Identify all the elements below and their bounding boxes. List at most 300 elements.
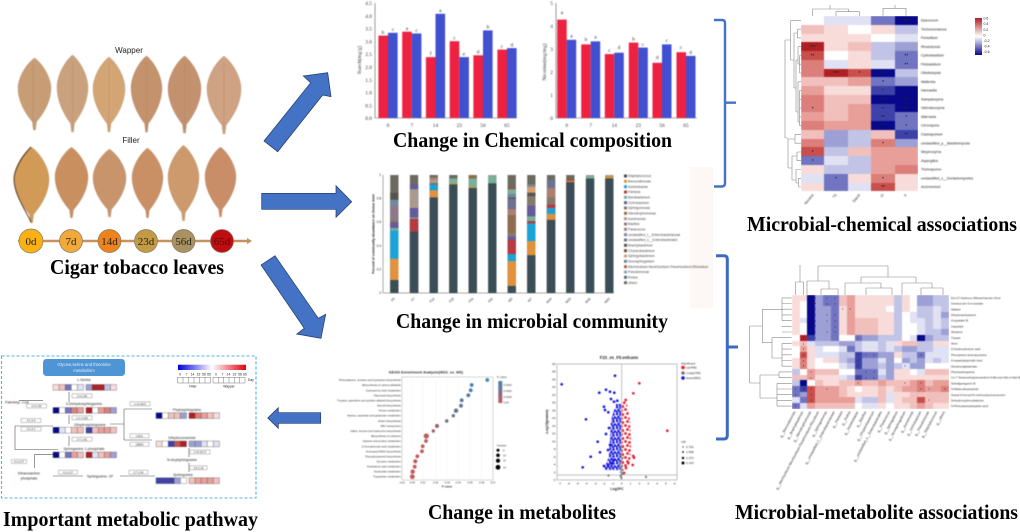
colour scale legend: -0.6 xyxy=(984,50,990,54)
timeline: 14d xyxy=(101,236,118,248)
heatmap grid: bacteria vs metabolites xyxy=(792,295,949,409)
column labels: g__Aureimonas xyxy=(900,410,915,433)
bar W23 xyxy=(566,175,574,293)
axis labels: Log2FC xyxy=(610,487,624,491)
column labels: g__Chryseobacterium xyxy=(856,410,875,442)
column labels: g__Pseudomonas xyxy=(914,410,930,437)
bracket: metabolite associations xyxy=(716,256,738,439)
colour scale legend xyxy=(975,16,990,55)
significance stars: * xyxy=(859,71,861,77)
axis labels: 1 xyxy=(379,173,381,177)
chart: starch bars: c xyxy=(392,27,395,33)
metabolite labels: L-Serine xyxy=(77,378,91,382)
axis labels: 0 xyxy=(554,478,556,482)
chart: starch bars: Starch(mg/g) xyxy=(356,46,363,74)
x axis: 0.01 xyxy=(420,480,426,484)
chart: nicotine bars: 65 xyxy=(683,123,689,129)
arrow: to chemical composition xyxy=(264,73,331,152)
pathway labels: Purine metabolism xyxy=(379,409,402,413)
legend: VIP: 3.143 xyxy=(686,461,694,465)
row labels: Aloin xyxy=(951,342,958,346)
chart: starch bars: d xyxy=(477,50,480,56)
chart: microbial community stacked bars xyxy=(372,173,709,304)
pathway labels: Alanine, aspartate and glutamate metabolism xyxy=(347,414,402,418)
chart: starch bars: 1.5 xyxy=(365,78,372,84)
pathway labels: Biosynthesis of various alkaloids xyxy=(362,383,402,387)
column labels: g__Brachybacterium xyxy=(786,410,804,440)
row labels: Cladosporium xyxy=(921,132,943,136)
filler leaf row xyxy=(14,145,236,223)
axis labels: F7 xyxy=(410,297,416,302)
chart: nicotine bars: b xyxy=(632,36,635,42)
legend: number: 8 xyxy=(503,448,505,452)
row labels: Dihydrotachysterol xyxy=(951,313,976,317)
chart: nicotine bars xyxy=(541,1,697,129)
label: Wapper: Wapper xyxy=(115,46,143,55)
significance stars: * xyxy=(882,141,884,147)
axis labels: -Log10(pvalue) xyxy=(545,410,549,434)
row labels: Oxypalatin B xyxy=(951,319,968,323)
pathway legend: 65 xyxy=(207,372,211,376)
column labels: g__unclassified_o__Enterobacterales xyxy=(853,410,883,462)
chart: starch bars: f xyxy=(430,50,432,57)
chart: nicotine bars: 56 xyxy=(659,123,665,129)
enzyme boxes: CERS xyxy=(136,442,144,446)
pathway labels: Steroid biosynthesis xyxy=(377,404,402,408)
row labels xyxy=(951,296,1020,408)
colour scale legend: -0.4 xyxy=(984,44,990,48)
significance stars: * xyxy=(905,115,907,121)
pathway legend: 56 xyxy=(202,372,206,376)
pathway title badge: metabolism xyxy=(73,368,95,373)
row labels: N-Phenylacetylaspartic acid xyxy=(951,404,988,408)
legend: VIP: 1.558 xyxy=(686,450,694,454)
axis labels: -7 xyxy=(558,482,561,486)
pathway labels: Tropane, piperidine and pyridine alkaloid biosynthesis xyxy=(337,398,402,402)
arrow: to metabolites xyxy=(261,256,326,338)
significance stars: *** xyxy=(833,71,839,77)
chart: nicotine bars: 5 xyxy=(550,1,553,7)
plot title: KEGG Enrichment Analysis(W23_vs_W0) xyxy=(389,370,464,374)
legend: genera: Sphingobacterium xyxy=(628,254,655,258)
row labels: Ent-17-Hydroxy-16beta-Kauran-19-al xyxy=(951,296,1001,300)
bar W0 xyxy=(508,175,516,293)
significance stars: * xyxy=(812,150,814,156)
significance stars: * xyxy=(812,159,814,165)
chart: nicotine bars: a xyxy=(594,34,597,40)
metabolite labels: 3-Dehydrosphinganine xyxy=(66,402,102,406)
pathway labels: Tryptophan metabolism xyxy=(373,475,402,479)
row labels: D-aspartylpiperidic Acid xyxy=(951,359,983,363)
column labels: g__unclassified_f__Enterobacteriaceae xyxy=(804,411,836,465)
bar W56 xyxy=(586,175,594,293)
arrow: metabolites to pathway xyxy=(268,408,321,428)
chart: nicotine bars: d xyxy=(656,55,659,61)
row labels: unclassified_p__Basidiomycota xyxy=(921,141,970,145)
significance stars: ** xyxy=(881,185,885,191)
metabolite labels: N-Acylsphingosine xyxy=(167,458,197,462)
pathway labels: Arginine and proline metabolism xyxy=(363,439,402,443)
legend: genera: Ochrobactrum xyxy=(628,201,649,205)
chart: starch bars: 4.0 xyxy=(365,14,372,20)
axis labels: 0 xyxy=(379,291,381,295)
pathway labels: Tyrosine metabolism xyxy=(376,459,402,463)
axis labels: 6 xyxy=(554,455,556,459)
chart: starch bars: c xyxy=(453,36,456,42)
column labels: K xyxy=(903,193,908,197)
legend: genera: Chryseobacterium xyxy=(628,249,655,253)
chart: nicotine bars: a xyxy=(570,34,573,40)
pathway legend: 0 xyxy=(179,372,181,376)
bar F56 xyxy=(469,175,477,293)
chart: nicotine bars: 23 xyxy=(636,123,641,129)
axis labels: 20 xyxy=(552,401,556,405)
enzyme boxes: 1.1.1.102 xyxy=(76,416,88,420)
chart: nicotine bars: d xyxy=(689,50,692,56)
chart: nicotine bars: 4 xyxy=(550,24,553,30)
colour scale legend: -0.2 xyxy=(984,39,990,43)
chart: starch bars: b xyxy=(487,24,490,30)
bar F14 xyxy=(430,175,438,293)
legend: significance: up(406) xyxy=(686,366,697,370)
axis labels: Percent of community abundance on Genus level xyxy=(372,194,376,274)
column labels: TS xyxy=(832,193,838,199)
row labels: Hannaella xyxy=(921,89,937,93)
chart: starch bars: c xyxy=(415,28,418,34)
row labels: Nicotinoylglutamate xyxy=(951,364,978,368)
column labels: Cl xyxy=(880,193,885,198)
arrow: to microbial community xyxy=(262,186,352,217)
panel: pathway xyxy=(2,356,256,498)
threshold lines xyxy=(557,364,677,480)
row labels: Abietinol xyxy=(951,330,963,334)
pathway legend: 7 xyxy=(222,372,224,376)
row labels: Phytosphingosine xyxy=(951,370,975,374)
pathway labels: Nucleotide metabolism xyxy=(374,470,402,474)
column labels: g__Rothia xyxy=(841,410,852,426)
legend: number: 14 xyxy=(503,465,506,469)
column labels: g__Bacillus xyxy=(856,410,867,428)
axis labels: 30 xyxy=(552,362,556,366)
pathway labels: Biosynthesis of cofactors xyxy=(371,434,402,438)
legend: genera: unclassified_o__Enterobacterales xyxy=(628,238,678,242)
row labels: Geranyl pin-3-ol acetate xyxy=(951,302,983,306)
axis labels: W0 xyxy=(507,297,514,303)
chart: nicotine bars: 0 xyxy=(565,123,568,129)
column labels: g__Paracoccus xyxy=(876,410,891,433)
axis labels: W7 xyxy=(527,297,533,303)
enzyme boxes: 4.1.2.27 xyxy=(14,460,24,464)
row labels: Triostin xyxy=(951,336,961,340)
chart: nicotine bars: 7 xyxy=(589,123,592,129)
enzyme boxes xyxy=(12,394,210,474)
pathway legend: 23 xyxy=(197,372,200,376)
significance stars: * xyxy=(882,80,884,86)
heading: change in microbial community: Change in microbial community xyxy=(396,309,668,333)
column labels: g__Sphingomonas xyxy=(811,410,828,437)
axis labels: 3 xyxy=(647,482,649,486)
chart: starch bars: 2.0 xyxy=(365,65,372,71)
x axis: -0.01 xyxy=(399,480,406,484)
column labels: g__Novosphingobium xyxy=(888,410,907,441)
axis labels: F14 xyxy=(429,297,436,304)
row labels: Aspergillus xyxy=(921,159,938,163)
enzyme boxes: 2.3.1.50 xyxy=(31,404,42,408)
legend: genera: Rosea xyxy=(628,276,638,280)
legend: genera xyxy=(624,174,709,285)
row labels: Dehydroxyphenylalanine xyxy=(951,398,984,402)
chart: nicotine bars: 1 xyxy=(550,93,553,99)
axis labels: 10 xyxy=(552,439,556,443)
axis labels: 22 xyxy=(552,393,556,397)
axis labels: -4 xyxy=(585,482,588,486)
legend: VIP xyxy=(681,440,694,465)
x axis: 0.00 xyxy=(410,480,415,484)
heading: change in metabolites: Change in metabolites xyxy=(428,500,616,524)
pathway legend: 56 xyxy=(238,372,242,376)
chart: starch bars: a xyxy=(439,8,442,14)
panel: cigar tobacco leaves xyxy=(14,46,252,279)
legend: genera: Sphingomonas xyxy=(628,206,650,210)
enrichment dots xyxy=(410,378,489,479)
axis labels: F0 xyxy=(390,297,396,302)
axis labels: 1 xyxy=(630,482,632,486)
heading: cigar tobacco leaves: Cigar tobacco leaves xyxy=(50,255,224,279)
pathway labels: Phenylpropanoid biosynthesis xyxy=(365,454,402,458)
row labels: Capsidiol xyxy=(951,324,964,328)
legend: genera: Stenotrophomonas xyxy=(628,212,656,216)
column labels: g__Brevundimonas xyxy=(779,410,797,438)
chart: nicotine bars: Nicotine(mg/mg) xyxy=(541,43,548,81)
wrapper leaf row xyxy=(18,55,241,134)
bar W65 xyxy=(605,175,614,293)
volcano title: F23_vs_F0.volcano xyxy=(600,355,639,360)
row labels: Maltitol xyxy=(951,307,961,311)
chart: nicotine bars: 3 xyxy=(550,47,553,53)
column labels xyxy=(804,193,908,205)
axis labels: 0.4 xyxy=(377,244,381,248)
enzyme boxes: 2.3.1.50 xyxy=(77,394,87,398)
column labels: Starch xyxy=(852,193,861,203)
pathway legend: 0 xyxy=(215,372,217,376)
legend: genera: Pseudomonas xyxy=(628,270,649,274)
metabolite labels: phosphate xyxy=(21,476,37,480)
axis labels: 6 xyxy=(674,482,676,486)
legend: genera: Aureimonas xyxy=(628,217,646,221)
enzyme boxes: 3.5.1.23 xyxy=(193,466,204,470)
legend: number: 12 xyxy=(503,459,506,463)
significance stars: ** xyxy=(811,54,815,60)
pathway labels: Zeatin biosynthesis xyxy=(378,419,402,423)
column labels: g__Ochrobactrum xyxy=(906,410,922,436)
legend: genera: Acinetobacter xyxy=(628,185,649,189)
axis labels: W56 xyxy=(584,297,592,304)
row labels: Epicoccum xyxy=(921,18,938,22)
row labels: Rhodotorula xyxy=(921,45,940,49)
metabolite labels: Sphingosine xyxy=(173,473,193,477)
chart: starch bars xyxy=(356,1,517,129)
legend: genera: others xyxy=(628,281,638,285)
axis labels: 4 xyxy=(554,462,556,466)
panel: microbial-metabolite heatmap xyxy=(750,265,1020,490)
pathway title badge xyxy=(43,359,125,376)
axis labels: 4 xyxy=(656,482,658,486)
column labels xyxy=(775,410,946,490)
row labels: Meyerozyma xyxy=(921,150,941,154)
axis labels xyxy=(545,362,676,491)
up-regulated points xyxy=(622,383,667,473)
enzyme boxes: 1.14.19.17 xyxy=(193,450,207,454)
legend: genera: Novosphingobium xyxy=(628,260,655,264)
axis labels: 26 xyxy=(552,377,556,381)
chart: starch bars: 0 xyxy=(387,123,390,129)
chart: nicotine bars: c xyxy=(642,42,645,48)
row labels: Gibellulopsis xyxy=(921,71,941,75)
axis labels: 12 xyxy=(552,432,556,436)
row labels: D-Hydroxybutyric acid xyxy=(951,347,981,351)
legend: significance xyxy=(681,362,701,380)
chart: starch bars: 0.0 xyxy=(365,116,372,122)
column labels: Nicotine xyxy=(804,193,815,205)
legend: P value: 0.0400 xyxy=(504,389,512,393)
chart: starch bars: 23 xyxy=(457,123,462,129)
row labels: Cercospora xyxy=(921,124,939,128)
heading: important metabolic pathway: Important metabolic pathway xyxy=(3,507,258,531)
chart: nicotine bars: 2 xyxy=(550,70,553,76)
legend: significance: down(582) xyxy=(686,376,701,380)
row labels: Trichosporon xyxy=(921,168,941,172)
significance marks xyxy=(796,298,945,406)
chart: starch bars: d xyxy=(510,42,513,48)
axis labels: -5 xyxy=(576,482,579,486)
axis labels: W23 xyxy=(565,297,572,304)
row labels: Penicillium xyxy=(921,36,938,40)
column labels: g__Stenotrophomonas xyxy=(793,410,812,443)
chart: nicotine bars: 0 xyxy=(550,116,553,122)
chart: starch bars: 56 xyxy=(480,123,486,129)
axis labels: -6 xyxy=(567,482,570,486)
pathway legend: Filler xyxy=(189,384,197,388)
volcano frame xyxy=(557,364,677,480)
plot frame xyxy=(402,377,493,480)
bar F0 xyxy=(390,175,398,293)
significance stars: *** xyxy=(903,98,909,104)
x axis: 0.06 xyxy=(479,480,485,484)
significance stars xyxy=(810,19,909,191)
expression cells xyxy=(53,384,220,484)
chart: starch bars: 3.0 xyxy=(365,39,372,45)
chart: starch bars: c xyxy=(501,44,504,50)
legend: P value xyxy=(497,375,512,404)
pathway labels: ABC transporters xyxy=(380,424,402,428)
pathway legend: 14 xyxy=(191,372,194,376)
row labels: Schidigeragenin B xyxy=(951,381,975,385)
axis labels: 0.6 xyxy=(377,220,381,224)
chart: starch bars: b xyxy=(382,30,385,36)
axis labels: 2 xyxy=(554,470,556,474)
chart: nicotine bars: c xyxy=(680,45,683,51)
bar F65 xyxy=(488,175,496,293)
axis labels: 18 xyxy=(552,408,556,412)
significance stars: *** xyxy=(880,98,886,104)
chart: starch bars: a xyxy=(406,26,409,32)
legend: significance: Significant xyxy=(681,362,695,366)
legend: genera: Pantoea xyxy=(628,190,640,194)
significance stars: *** xyxy=(903,106,909,112)
enzyme boxes: 3.1.3.4 xyxy=(27,419,36,423)
pathway legend: Day xyxy=(248,378,254,382)
pathway labels xyxy=(337,378,402,479)
row labels: Wallemia xyxy=(921,80,935,84)
pathway legend: 23 xyxy=(233,372,236,376)
metabolite labels: Phytosphingosine xyxy=(173,408,201,412)
pathway legend: 65 xyxy=(243,372,247,376)
enzyme boxes: 4.1.2.27 xyxy=(63,470,73,474)
chart: KEGG enrichment bubble plot xyxy=(337,370,512,488)
significance stars: ** xyxy=(904,62,908,68)
legend: genera: Bacillus xyxy=(628,222,640,226)
dendrogram: left xyxy=(785,20,801,187)
pathway legend xyxy=(178,365,254,388)
pathway labels: Cyanoamino acid metabolism xyxy=(366,388,402,392)
row labels: Cystobasidium xyxy=(921,54,944,58)
axis labels: 0.2 xyxy=(377,267,381,271)
axis labels: W65 xyxy=(604,297,611,304)
bracket: chemical associations xyxy=(714,20,736,186)
x axis: 0.07 xyxy=(490,480,496,484)
legend: VIP: 0.701 xyxy=(686,445,694,449)
down-regulated points xyxy=(562,376,621,470)
significance stars: ** xyxy=(904,133,908,139)
enzyme boxes: 3.1.4.1 xyxy=(27,427,36,431)
row labels xyxy=(921,18,973,189)
metabolite labels: Palmitoyl- CoA xyxy=(5,400,29,404)
legend: genera: Paracoccus xyxy=(628,228,646,232)
significance stars: * xyxy=(882,89,884,95)
pathway title badge: Glycine,serine and threonine xyxy=(57,362,111,367)
metabolite labels: Ethanolamine xyxy=(18,472,40,476)
chart: starch bars: e xyxy=(463,52,466,58)
axis labels xyxy=(372,173,611,304)
column labels: g__Pantoea xyxy=(832,410,844,429)
legend: genera: Allorhizobium-Neorhizobium-Pararhizobium-Rhizobium xyxy=(628,265,709,269)
significance stars: *** xyxy=(880,124,886,130)
legend: VIP: VIP xyxy=(681,440,686,444)
pathway labels: Phenylalanine, tyrosine and tryptophan biosynthesis xyxy=(339,378,402,382)
row labels: Trichomonascus xyxy=(921,27,947,31)
decorative pale band xyxy=(690,167,713,308)
row labels: Sampaiozyma xyxy=(921,97,943,101)
colour scale legend: 0 xyxy=(984,34,986,38)
row labels: Acetyl-N-formyl-5-methoxykynurenamine xyxy=(951,393,1006,397)
row labels: Vishniacozyma xyxy=(921,106,945,110)
axis labels: 14 xyxy=(552,424,556,428)
x axis: 0.04 xyxy=(456,480,461,484)
pathway labels: Valine, leucine and isoleucine biosynthesis xyxy=(350,429,402,433)
legend: P value: 0.00 xyxy=(504,400,509,404)
legend: genera: Brevibacterium xyxy=(628,196,650,200)
legend: P value: P_value xyxy=(497,375,507,379)
significance stars: * xyxy=(882,176,884,182)
heatmap grid: fungi vs chemicals xyxy=(801,16,918,192)
axis labels: 24 xyxy=(552,385,556,389)
bar F7 xyxy=(410,175,418,293)
axis labels: F65 xyxy=(487,297,494,304)
significance stars: ** xyxy=(881,106,885,112)
dendrogram: top xyxy=(796,265,943,295)
significance stars: * xyxy=(905,124,907,130)
row labels: Filobasidium xyxy=(921,62,941,66)
